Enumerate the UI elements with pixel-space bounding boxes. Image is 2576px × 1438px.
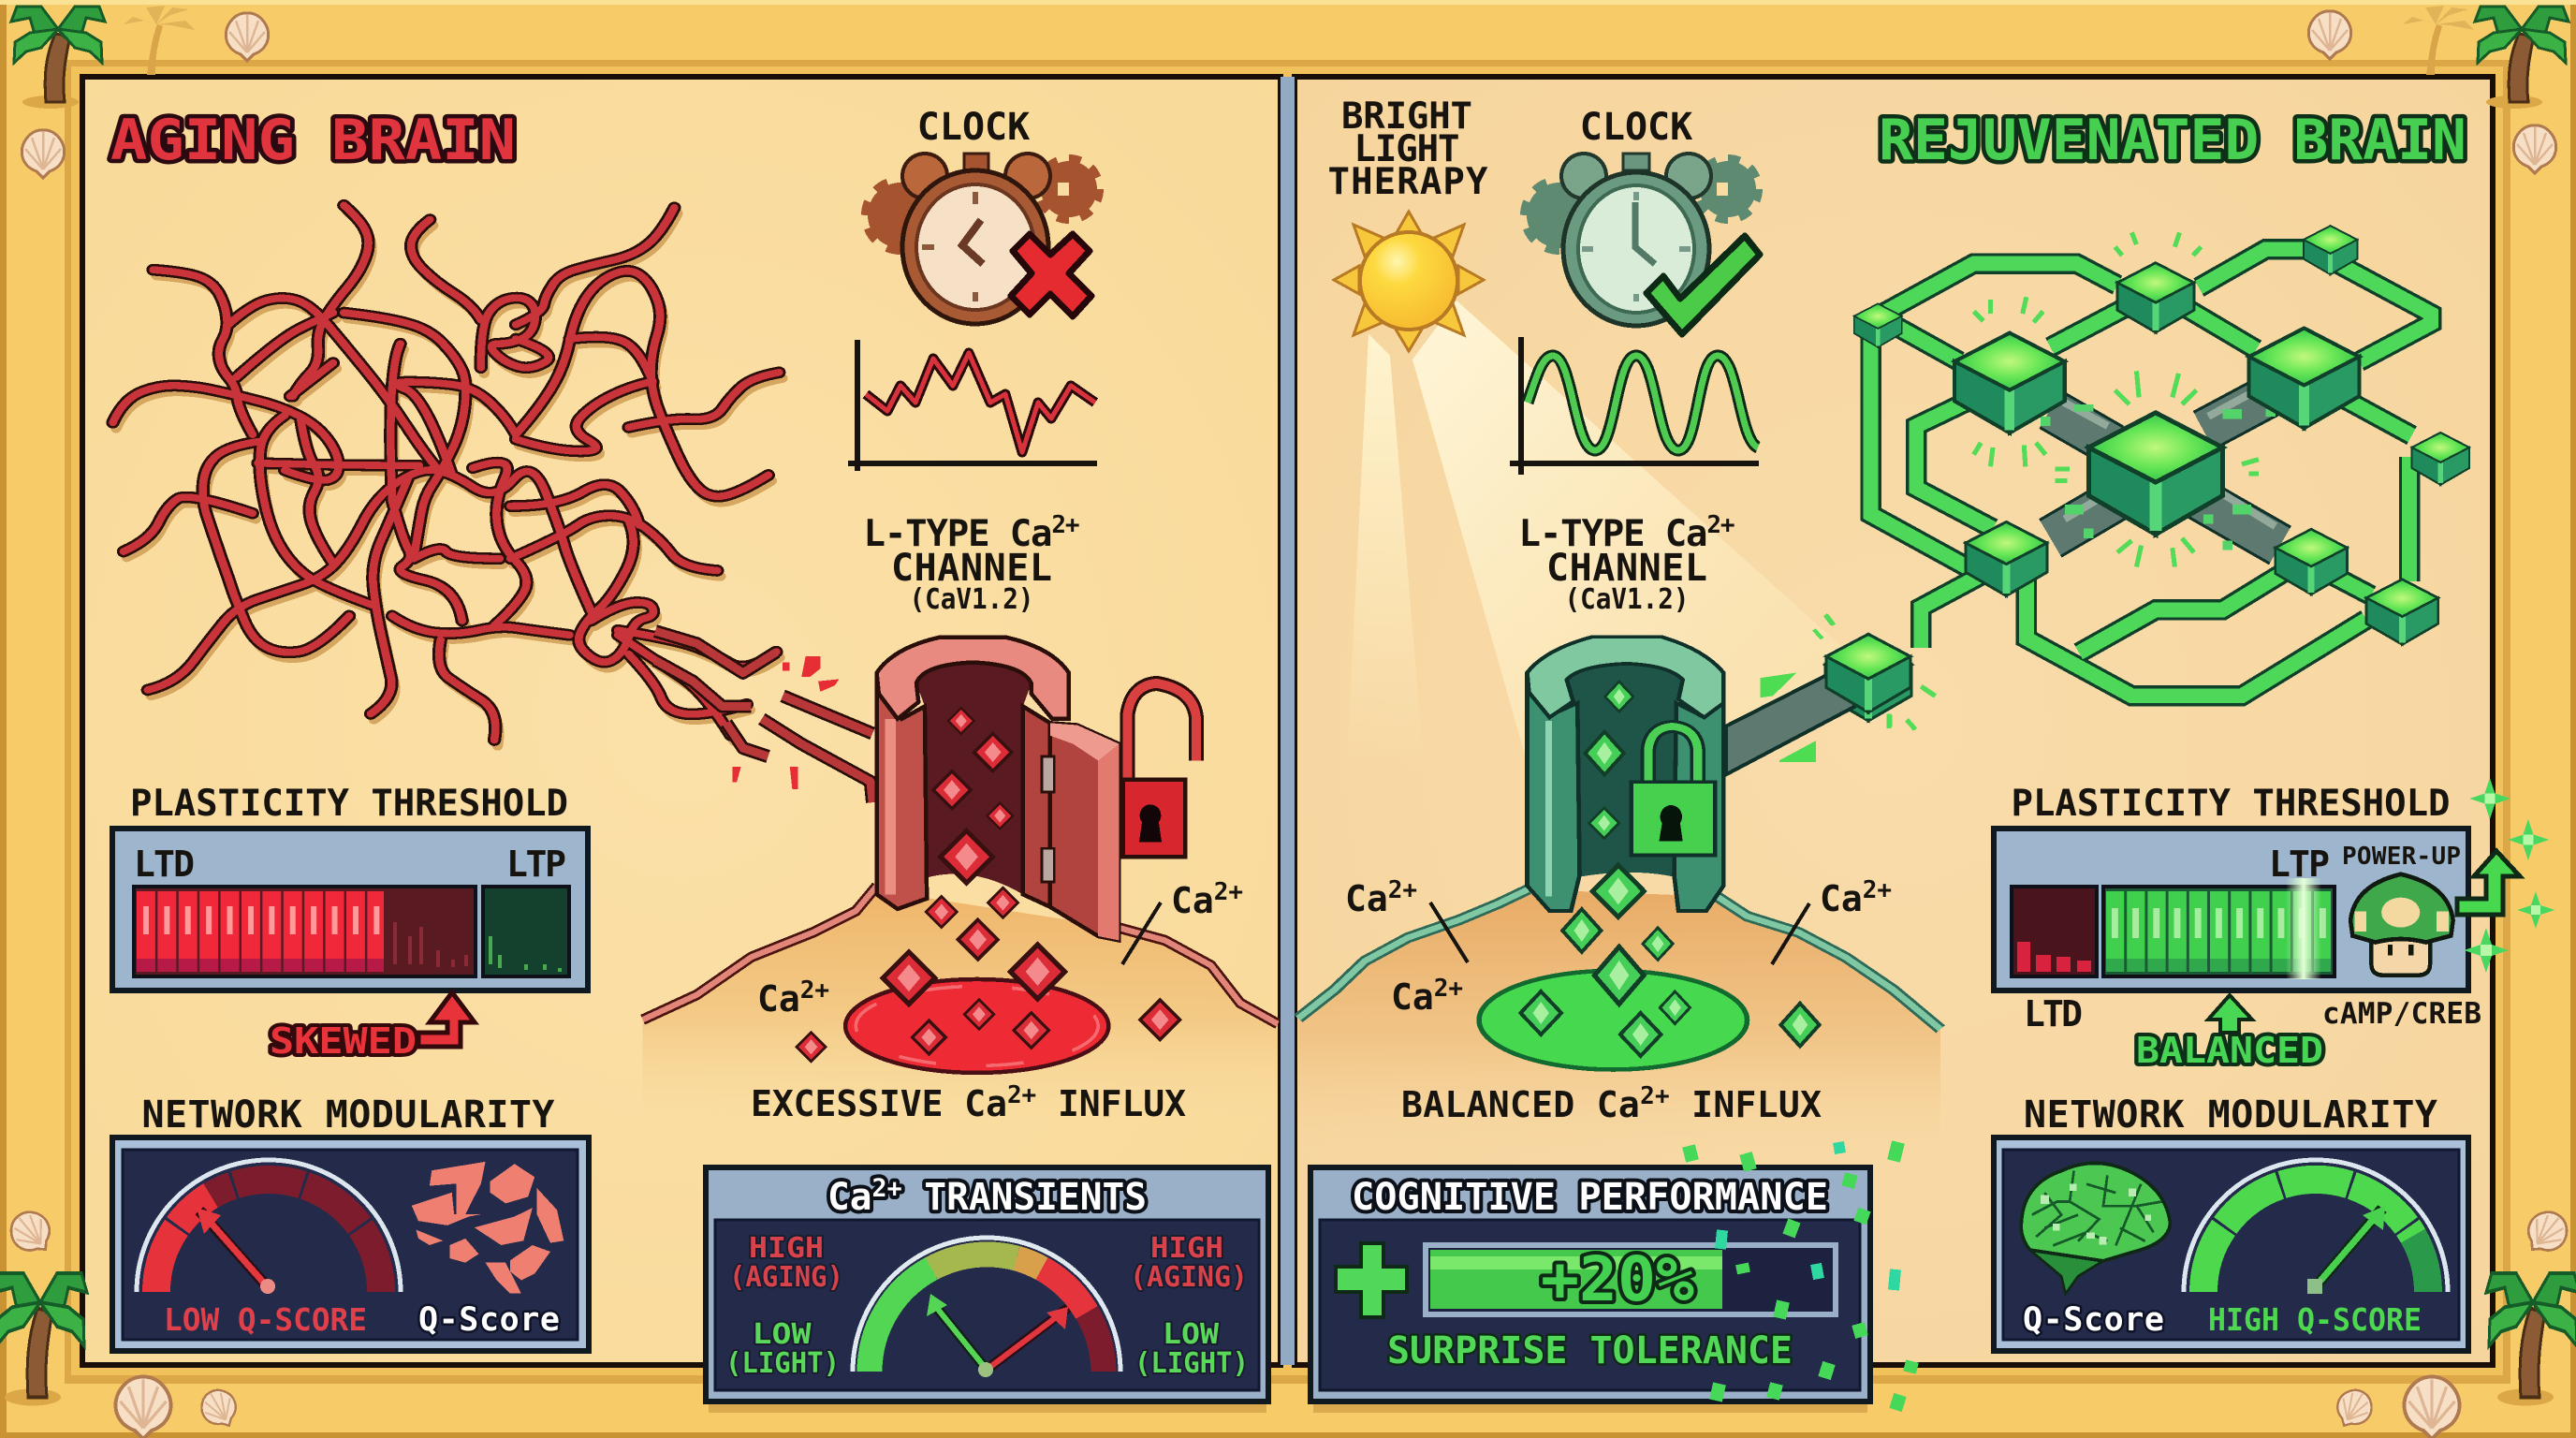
label: balanced influx: BALANCED Ca: [1401, 1084, 1640, 1125]
cell body sand: [1298, 889, 1940, 1166]
label: plasticity threshold left: PLASTICITY THRESHOLD: [130, 783, 568, 825]
pipes fill: [1871, 249, 2431, 696]
panel: cognitive performance: [1310, 1167, 1870, 1413]
icon: shell top-left: [226, 13, 269, 61]
label: bright light therapy: THERAPY: [1327, 161, 1488, 203]
icon: shell bottom-right large: [2404, 1376, 2460, 1438]
gauge: Ca2+ transients: [853, 1238, 1120, 1377]
membrane left: [643, 886, 1278, 1024]
label: Q-score: Q-Score: [2023, 1301, 2164, 1339]
icon: faded palm right: [2403, 6, 2474, 75]
connector sparks: [1814, 615, 1934, 730]
label: Ca2+ upper left panel: Ca: [1171, 880, 1214, 921]
label: bright light therapy: LIGHT: [1354, 128, 1460, 170]
frame top highlight: [0, 0, 2576, 5]
lock shackle outline: [1127, 683, 1196, 785]
light beams from sun: [1346, 301, 1872, 824]
icon: sun: [1334, 212, 1484, 351]
label: clock right: CLOCK: [1580, 106, 1692, 149]
channel rim: [1528, 637, 1723, 717]
LTP specks: [489, 936, 562, 972]
lock shackle outline: [1648, 726, 1698, 782]
tangled red network: [113, 205, 783, 746]
gray beam highlights: [2050, 386, 2276, 526]
label: balanced: BALANCED: [2136, 1030, 2323, 1071]
label: LTP: LTP: [506, 844, 566, 885]
labels: high aging left: [725, 1232, 1249, 1380]
icon: palm top-right: [2475, 7, 2569, 109]
gauge: low Q-score: [137, 1160, 401, 1294]
hinges: [1042, 756, 1054, 882]
door edge: [1098, 744, 1120, 940]
label: plasticity threshold right: PLASTICITY THRESHOLD: [2011, 783, 2451, 825]
teal particles: [1720, 1142, 1895, 1290]
icon: shell left: [22, 130, 65, 178]
panel: aging brain background: [82, 77, 1281, 1365]
severed wire fill: [655, 631, 872, 802]
icon: palm top-left: [11, 7, 105, 109]
central divider: [1281, 77, 1295, 1365]
label: Ca2+ upper left panel: 2+: [1214, 878, 1243, 906]
pointer: Ca2+ left panel: [1122, 902, 1161, 964]
panel: network modularity left: [112, 1137, 589, 1351]
sparkles: [2464, 778, 2554, 973]
icon: shell bottom-left small: [196, 1384, 244, 1434]
channel left wall: [877, 673, 927, 909]
label: excessive influx: 2+: [1007, 1081, 1036, 1109]
bar box LTP: [483, 887, 569, 976]
isometric green network: [1825, 226, 2469, 729]
label: skewed: SKEWED: [270, 1020, 417, 1062]
inner channel: [916, 663, 1032, 894]
icon: shell top-right: [2308, 11, 2351, 59]
label: LTD: LTD: [2024, 993, 2083, 1034]
label: excessive influx: INFLUX: [1036, 1083, 1186, 1124]
inner channel: [1567, 664, 1685, 877]
label: low Q-score: LOW Q-SCORE: [164, 1301, 367, 1338]
icon: faded palm left: [124, 6, 195, 75]
label: bright light therapy: [1327, 95, 1488, 203]
label: Ca2+ lower left panel: Ca: [757, 978, 800, 1020]
labels: high aging left: LOW: [1163, 1318, 1220, 1351]
green specks on beams: [2041, 404, 2276, 550]
title: aging brain: AGING BRAIN: [110, 108, 516, 173]
icon: plus: [1336, 1243, 1407, 1317]
lock body: [1632, 782, 1715, 856]
title: rejuvenated brain: REJUVENATED BRAIN: [1879, 108, 2466, 173]
icon: shell bottom-right small: [2329, 1384, 2378, 1434]
membrane: [1298, 889, 1940, 1029]
icon: working clock: [1527, 154, 1760, 334]
arrow: balanced: [2208, 995, 2252, 1033]
label: surprise tolerance: SURPRISE TOLERANCE: [1387, 1329, 1793, 1372]
arrow: power-up: [2457, 851, 2520, 915]
label: network modularity right: NETWORK MODULARITY: [2024, 1093, 2437, 1137]
brain light patches: [2041, 1184, 2151, 1244]
progress bar frame: [1426, 1245, 1836, 1314]
pool ring: [856, 987, 1098, 1065]
labels: high aging left: (LIGHT): [725, 1347, 840, 1380]
calcium pool: [1479, 971, 1748, 1069]
label: power-up: POWER-UP: [2342, 843, 2461, 871]
panel: rejuvenated brain background: [1295, 77, 2493, 1365]
panel: Ca2+ transients: [706, 1167, 1268, 1413]
icon: shell left lower: [3, 1204, 60, 1262]
icon: mushroom power-up: [2350, 874, 2453, 976]
label: L-type channel right: L-TYPE Ca: [1518, 513, 1708, 555]
icon: shell bottom-left large: [115, 1376, 171, 1438]
label: +20%: +20%: [1541, 1243, 1694, 1315]
green particle burst: [1689, 1142, 1912, 1410]
channel: closed green calcium channel: [1298, 615, 1940, 1166]
gray beams outline: [2050, 395, 2280, 546]
progress bar fill: [1430, 1250, 1722, 1309]
label: Ca2+ lower left panel: 2+: [800, 976, 829, 1005]
channel right wall: [1675, 703, 1723, 911]
label: balanced influx: 2+: [1640, 1082, 1670, 1110]
LTD small bars: [2017, 942, 2091, 972]
title: Ca2+ transients: 2+: [872, 1174, 902, 1203]
wall highlight: [886, 719, 896, 894]
label: Q-score: Q-Score: [418, 1301, 560, 1339]
calcium diamonds: [1520, 682, 1820, 1056]
label: L-type channel right: (CaV1.2): [1565, 583, 1689, 616]
calcium diamonds: [797, 708, 1179, 1062]
label: L-type channel left: 2+: [1051, 511, 1080, 539]
label: Ca2+ right right panel: 2+: [1863, 876, 1892, 904]
label: Ca2+ lower right panel: Ca: [1391, 976, 1434, 1018]
LTD residual specks: [393, 922, 468, 967]
labels: high aging left: LOW: [753, 1318, 812, 1351]
icon: palm bottom-left: [0, 1273, 87, 1406]
label: L-type channel right: CHANNEL: [1546, 547, 1707, 590]
connector beam: [1726, 676, 1854, 775]
membrane highlight: [1298, 889, 1940, 1029]
nodes: [1825, 226, 2469, 721]
icon: broken clock: [868, 154, 1097, 324]
icon: shell right lower: [2518, 1204, 2575, 1262]
gray beams fill: [2050, 395, 2280, 546]
cell body sand: [643, 890, 1278, 1128]
label: Ca2+ right right panel: Ca: [1820, 878, 1863, 919]
label: Ca2+ lower right panel: 2+: [1434, 975, 1463, 1003]
channel: open red calcium channel: [643, 631, 1278, 1128]
label: excessive influx: EXCESSIVE Ca: [751, 1083, 1007, 1124]
label: L-type channel left: CHANNEL: [891, 547, 1052, 590]
title: Ca2+ transients: TRANSIENTS: [902, 1176, 1147, 1219]
label: balanced influx: INFLUX: [1670, 1084, 1822, 1125]
label: L-type channel left: (CaV1.2): [910, 583, 1033, 616]
label: Ca2+ left upper right panel: 2+: [1388, 876, 1417, 904]
labels: high aging left: HIGH: [1150, 1232, 1223, 1265]
arrow: skewed: [418, 992, 475, 1047]
progress bar highlight: [1430, 1256, 1722, 1269]
label: bright light therapy: BRIGHT: [1341, 95, 1472, 138]
pointers: Ca2+ right panel: [1430, 902, 1809, 964]
labels: high aging left: HIGH: [749, 1232, 824, 1265]
bar track LTD: [134, 887, 476, 976]
chart: noisy rhythm: [848, 340, 1097, 471]
title: cognitive performance: COGNITIVE PERFORMANCE: [1352, 1176, 1828, 1219]
label: L-type channel left: [863, 511, 1080, 616]
door top: [1050, 723, 1120, 760]
channel right wall: [1023, 706, 1050, 907]
severed wire pieces: [655, 631, 872, 802]
icon: shell right: [2513, 125, 2556, 173]
labels: high aging left: (AGING): [1130, 1261, 1248, 1294]
panel: network modularity right: [1994, 1137, 2468, 1351]
label: L-type channel left: L-TYPE Ca: [863, 513, 1053, 555]
label: L-type channel right: 2+: [1706, 511, 1735, 539]
calcium pool: [845, 979, 1108, 1073]
icon: green brain: [2021, 1163, 2171, 1294]
labels: high aging left: (LIGHT): [1134, 1347, 1249, 1380]
open door: [1050, 723, 1120, 940]
lock shackle: [1648, 726, 1698, 782]
lock keyhole: [1139, 804, 1162, 843]
label: clock left: CLOCK: [917, 106, 1030, 149]
membrane highlight: [643, 886, 1278, 1024]
lock body: [1123, 780, 1185, 857]
pipes outline: [1871, 249, 2431, 696]
channel left wall: [1528, 672, 1580, 911]
label: Ca2+ left upper right panel: Ca: [1345, 878, 1388, 919]
icon: palm bottom-right: [2486, 1273, 2576, 1406]
label: LTP: LTP: [2269, 844, 2330, 885]
chart: regular rhythm: [1510, 337, 1759, 475]
connector node: [1826, 634, 1910, 712]
connector green highlights: [1760, 672, 1816, 762]
labels: high aging left: (AGING): [729, 1261, 843, 1294]
label: cAMP/CREB: cAMP/CREB: [2322, 997, 2481, 1031]
wall highlight: [1545, 721, 1552, 897]
label: network modularity left: NETWORK MODULARITY: [142, 1093, 554, 1137]
energy sparks: [1825, 232, 2259, 729]
box LTP bars track: [2103, 887, 2334, 976]
lock keyhole: [1659, 805, 1683, 841]
label: high Q-score: HIGH Q-SCORE: [2208, 1301, 2422, 1338]
gauge: high Q-score: [2184, 1160, 2448, 1294]
title: Ca2+ transients: Ca: [827, 1176, 872, 1219]
box LTD: [2012, 887, 2097, 976]
LTP bars: [2106, 891, 2331, 972]
glow marker: [2286, 878, 2321, 979]
red sparks: [733, 656, 839, 789]
panel: plasticity threshold left: [112, 829, 588, 990]
lock shackle: [1127, 683, 1196, 785]
label: L-type channel right: [1518, 511, 1735, 616]
icon: fragmented brain: [412, 1162, 564, 1294]
channel rim: [877, 638, 1069, 719]
label: LTD: LTD: [134, 844, 195, 885]
panel: plasticity threshold right: [1994, 829, 2468, 990]
LTD bars: [137, 891, 384, 972]
